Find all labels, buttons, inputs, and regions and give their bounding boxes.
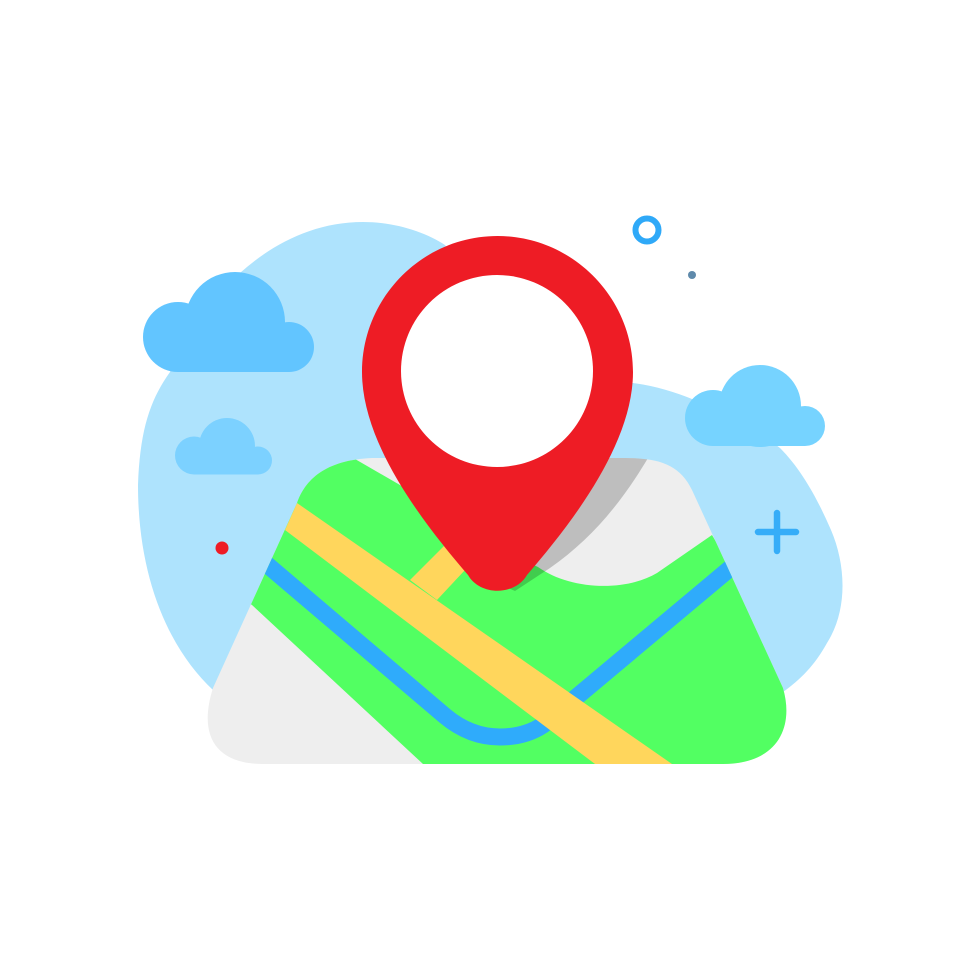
map base — [208, 458, 784, 764]
blue river — [258, 557, 740, 737]
location pin — [362, 236, 633, 591]
plus decoration — [758, 513, 796, 551]
pin hole — [401, 275, 593, 467]
small dot blue — [688, 271, 696, 279]
yellow road — [285, 503, 672, 764]
small dot red — [216, 542, 228, 554]
pin shadow — [510, 458, 647, 591]
background blob — [138, 222, 843, 692]
yellow branch road — [410, 545, 465, 600]
cloud small left — [175, 418, 272, 474]
cloud right — [685, 365, 825, 447]
map — [208, 458, 786, 764]
ring decoration — [636, 218, 658, 242]
green land — [251, 460, 786, 764]
cloud top left — [143, 272, 314, 372]
map location illustration — [138, 216, 842, 764]
pin body — [362, 236, 633, 591]
